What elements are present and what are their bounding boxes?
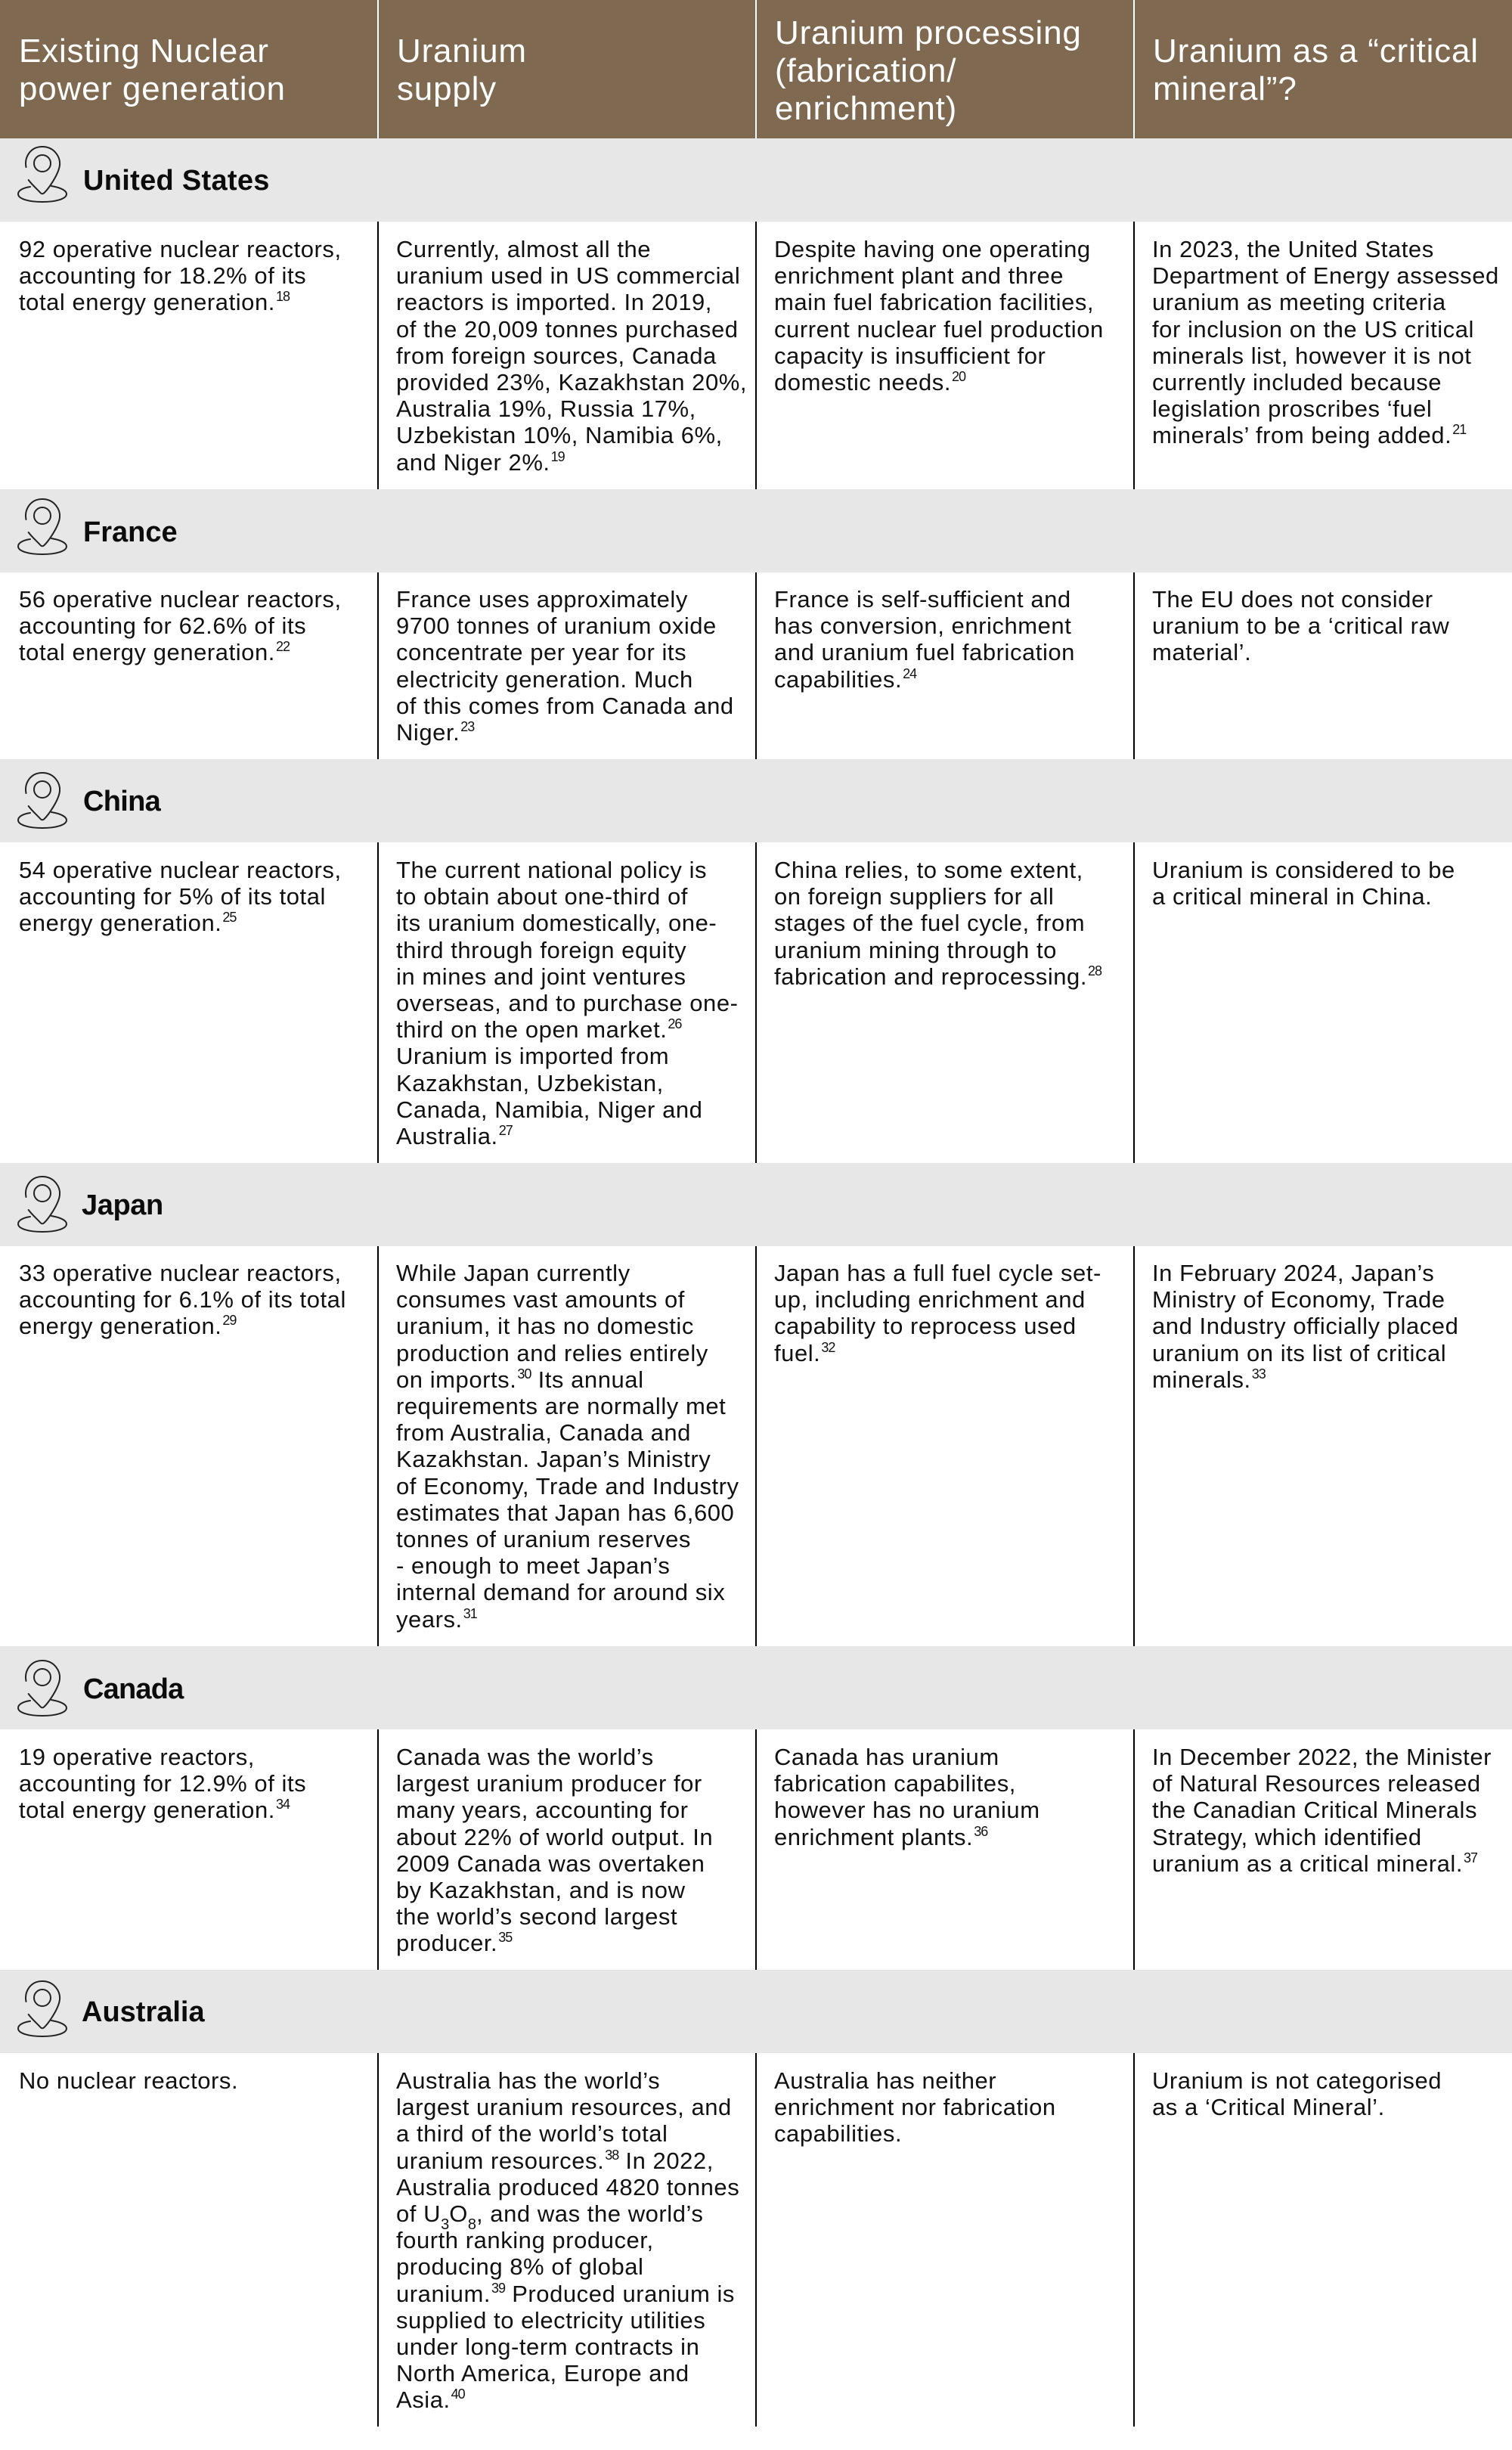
text: Japan supply: production and relies entirely [396, 1340, 708, 1366]
text: Japan processing [774, 1260, 1101, 1366]
text: Australia supply: largest uranium resources, and [396, 2094, 732, 2120]
text: France generation: accounting for 62.6% of its [19, 612, 306, 639]
text: US processing [774, 236, 1104, 395]
panel: Australia [0, 1970, 1512, 2427]
text: Australia generation: No nuclear reactors. [19, 2067, 238, 2094]
text: Japan supply: internal demand for around six [396, 1579, 725, 1605]
text: Canada supply: about 22% of world output. In [396, 1824, 713, 1850]
text: Canada critical mineral: the Canadian Critical Minerals [1152, 1797, 1477, 1823]
text: Japan processing: up, including enrichment and [774, 1286, 1086, 1313]
text: Japan supply: - enough to meet Japan’s [396, 1552, 670, 1579]
text: Japan supply: While Japan currently [396, 1260, 631, 1286]
text: China supply: The current national policy is [396, 857, 707, 883]
text: China generation [19, 857, 342, 936]
text: Japan supply [396, 1260, 739, 1633]
text: US critical mineral: minerals list, however it is not [1152, 343, 1471, 369]
text: US generation: total energy generation.18 [19, 289, 290, 315]
text: Canada supply: producer.35 [396, 1930, 512, 1956]
heading: uranium supply: Uranium [397, 33, 527, 70]
text: Australia critical mineral: as a ‘Critical Mineral’. [1152, 2094, 1385, 2120]
text: Canada supply: largest uranium producer for [396, 1770, 702, 1797]
text: Australia supply: Australia has the world’s [396, 2067, 660, 2094]
text: US supply: Currently, almost all the [396, 236, 651, 262]
text: Australia supply: Asia.40 [396, 2386, 465, 2413]
text: US critical mineral: legislation proscribes ‘fuel [1152, 395, 1432, 422]
text: France processing: France is self-sufficient and [774, 586, 1071, 612]
heading: United States: United States [83, 165, 270, 197]
text: Canada processing: fabrication capabilites, [774, 1770, 1016, 1797]
text: France supply: concentrate per year for its [396, 639, 686, 665]
text: Japan supply: consumes vast amounts of [396, 1286, 685, 1313]
text: Canada critical mineral: of Natural Resources released [1152, 1770, 1481, 1797]
text: China generation: energy generation.25 [19, 910, 236, 936]
panel: Japan [0, 1163, 1512, 1646]
text: France supply: of this comes from Canada and [396, 693, 734, 719]
text: Australia supply: producing 8% of global [396, 2253, 644, 2280]
text: China generation: accounting for 5% of its total [19, 883, 326, 910]
text: Japan supply: from Australia, Canada and [396, 1419, 691, 1446]
text: Australia supply: Australia produced 4820 tonnes [396, 2174, 739, 2200]
icon: location pin [17, 146, 67, 203]
text: Japan supply: uranium, it has no domestic [396, 1313, 694, 1339]
text: Australia supply: uranium resources.38 In 2022, [396, 2148, 714, 2174]
heading: uranium processing [775, 14, 1082, 127]
text: Australia supply [396, 2067, 739, 2413]
text: Canada generation [19, 1744, 306, 1823]
text: France generation: 56 operative nuclear reactors, [19, 586, 342, 612]
icon: location pin [17, 1176, 67, 1233]
heading: Australia: Australia [82, 1996, 205, 2028]
heading: uranium as a critical mineral [1153, 33, 1479, 107]
text: France critical mineral [1152, 586, 1449, 665]
text: China supply: Australia.27 [396, 1123, 513, 1149]
text: China supply: its uranium domestically, one- [396, 910, 717, 936]
text: US supply: from foreign sources, Canada [396, 343, 717, 369]
text: US critical mineral: In 2023, the United States [1152, 236, 1434, 262]
text: Canada processing [774, 1744, 1040, 1850]
panel: United States [0, 138, 1512, 489]
text: US critical mineral: currently included because [1152, 369, 1442, 395]
text: Australia critical mineral: Uranium is not categorised [1152, 2067, 1442, 2094]
text: France generation [19, 586, 342, 665]
text: Canada critical mineral [1152, 1744, 1492, 1877]
text: China processing: fabrication and reprocessing.28 [774, 963, 1101, 990]
text: US supply: uranium used in US commercial [396, 262, 740, 289]
text: Australia supply: North America, Europe and [396, 2360, 689, 2386]
text: Australia supply: supplied to electricity utilities [396, 2307, 705, 2334]
text: Australia supply: uranium.39 Produced uranium is [396, 2281, 735, 2307]
text: China processing [774, 857, 1102, 990]
heading: uranium processing: Uranium processing [775, 14, 1082, 51]
text: US critical mineral: Department of Energy assessed [1152, 262, 1499, 289]
text: France supply: France uses approximately [396, 586, 688, 612]
text: Canada generation: total energy generation.34 [19, 1797, 290, 1823]
text: US supply: and Niger 2%.19 [396, 449, 565, 476]
text: China supply: overseas, and to purchase one- [396, 990, 738, 1016]
heading: Canada: Canada [83, 1673, 183, 1705]
text: US critical mineral [1152, 236, 1499, 448]
text: Canada supply: many years, accounting for [396, 1797, 688, 1823]
text: Japan supply: Kazakhstan. Japan’s Ministry [396, 1446, 711, 1472]
text: Japan supply: of Economy, Trade and Industry [396, 1473, 739, 1499]
heading: France: France [83, 516, 178, 548]
text: US processing: capacity is insufficient for [774, 343, 1046, 369]
text: Japan supply: requirements are normally met [396, 1393, 726, 1419]
text: France processing: capabilities.24 [774, 666, 916, 693]
text: US supply [396, 236, 747, 476]
header row [0, 0, 1512, 138]
text: Canada supply [396, 1744, 713, 1956]
heading: Japan: Japan [82, 1189, 163, 1221]
text: France supply [396, 586, 734, 746]
text: US critical mineral: minerals’ from being added.21 [1152, 422, 1466, 448]
text: Japan generation [19, 1260, 346, 1339]
text: Canada supply: by Kazakhstan, and is now [396, 1877, 686, 1903]
text: US processing: enrichment plant and three [774, 262, 1064, 289]
text: US generation: accounting for 18.2% of its [19, 262, 306, 289]
text: US generation: 92 operative nuclear reactors, [19, 236, 342, 262]
text: Japan processing: fuel.32 [774, 1340, 835, 1366]
text: China critical mineral [1152, 857, 1455, 910]
panel: China [0, 759, 1512, 1163]
text: Canada generation: 19 operative reactors, [19, 1744, 255, 1770]
text: China critical mineral: a critical mineral in China. [1152, 883, 1432, 910]
text: Japan processing: capability to reprocess used [774, 1313, 1077, 1339]
text: China supply: in mines and joint ventures [396, 963, 686, 990]
text: China processing: uranium mining through to [774, 937, 1057, 963]
text: Canada supply: Canada was the world’s [396, 1744, 654, 1770]
text: US supply: reactors is imported. In 2019, [396, 289, 712, 315]
text: China supply: Uranium is imported from [396, 1043, 669, 1069]
text: US processing: Despite having one operating [774, 236, 1091, 262]
heading: uranium supply: supply [397, 70, 497, 107]
text: US processing: current nuclear fuel production [774, 316, 1104, 343]
text: France critical mineral: The EU does not consider [1152, 586, 1433, 612]
text: Japan supply: years.31 [396, 1606, 477, 1633]
text: Japan generation: 33 operative nuclear reactors, [19, 1260, 342, 1286]
text: France supply: 9700 tonnes of uranium oxide [396, 612, 717, 639]
heading: existing nuclear power generation: Existing Nuclear [19, 33, 269, 70]
text: Australia critical mineral [1152, 2067, 1442, 2120]
text: Australia supply: a third of the world’s total [396, 2120, 668, 2147]
text: Canada processing: enrichment plants.36 [774, 1824, 987, 1850]
text: US critical mineral: for inclusion on the US critical [1152, 316, 1474, 343]
text: Japan supply: on imports.30 Its annual [396, 1366, 644, 1393]
text: China processing: on foreign suppliers for all [774, 883, 1054, 910]
text: Australia supply: of U3O8, and was the world’s [396, 2200, 703, 2233]
text: Canada critical mineral: Strategy, which identified [1152, 1824, 1422, 1850]
text: France processing: and uranium fuel fabrication [774, 639, 1075, 665]
text: France supply: electricity generation. Much [396, 666, 693, 693]
text: China processing: China relies, to some extent, [774, 857, 1083, 883]
heading: uranium processing: enrichment) [775, 90, 957, 127]
icon: location pin [17, 498, 67, 555]
text: Japan processing: Japan has a full fuel cycle set- [774, 1260, 1101, 1286]
text: China processing: stages of the fuel cycle, from [774, 910, 1085, 936]
text: Japan supply: tonnes of uranium reserves [396, 1526, 691, 1552]
text: France generation: total energy generation.22 [19, 639, 290, 665]
text: Australia supply: fourth ranking producer, [396, 2227, 654, 2253]
text: Canada supply: the world’s second largest [396, 1903, 677, 1930]
text: Japan critical mineral: and Industry officially placed [1152, 1313, 1458, 1339]
text: China supply: to obtain about one-third of [396, 883, 688, 910]
text: Australia processing: capabilities. [774, 2120, 902, 2147]
icon: location pin [17, 772, 67, 829]
text: France critical mineral: material’. [1152, 639, 1251, 665]
text: US supply: Uzbekistan 10%, Namibia 6%, [396, 422, 723, 448]
text: Japan critical mineral: In February 2024, Japan’s [1152, 1260, 1434, 1286]
text: Australia processing: Australia has neither [774, 2067, 996, 2094]
text: China supply: third through foreign equity [396, 937, 686, 963]
text: US supply: of the 20,009 tonnes purchased [396, 316, 739, 343]
heading: existing nuclear power generation [19, 33, 286, 107]
heading: uranium as a critical mineral: mineral”? [1153, 70, 1297, 107]
text: US processing: main fuel fabrication facilities, [774, 289, 1094, 315]
heading: existing nuclear power generation: power generation [19, 70, 286, 107]
text: Canada processing: however has no uranium [774, 1797, 1040, 1823]
text: Japan critical mineral: uranium on its list of critical [1152, 1340, 1446, 1366]
panel: France [0, 489, 1512, 759]
text: France processing: has conversion, enrichment [774, 612, 1071, 639]
text: Japan generation: accounting for 6.1% of its total [19, 1286, 346, 1313]
text: US supply: provided 23%, Kazakhstan 20%, [396, 369, 747, 395]
panel: Canada [0, 1646, 1512, 1970]
icon: location pin [17, 1660, 67, 1717]
text: US processing: domestic needs.20 [774, 369, 965, 395]
text: France processing [774, 586, 1075, 693]
heading: uranium processing: (fabrication/ [775, 52, 956, 89]
text: Japan critical mineral: Ministry of Economy, Trade [1152, 1286, 1445, 1313]
text: US generation [19, 236, 342, 315]
text: China supply: Kazakhstan, Uzbekistan, [396, 1070, 664, 1096]
heading: uranium as a critical mineral: Uranium as a “critical [1153, 33, 1479, 70]
text: Japan critical mineral [1152, 1260, 1458, 1393]
text: Japan critical mineral: minerals.33 [1152, 1366, 1266, 1393]
text: China supply [396, 857, 738, 1149]
text: Australia processing [774, 2067, 1056, 2147]
text: Canada generation: accounting for 12.9% of its [19, 1770, 306, 1797]
text: Canada critical mineral: In December 2022, the Minister [1152, 1744, 1492, 1770]
heading: uranium supply [397, 33, 527, 107]
text: Canada critical mineral: uranium as a critical mineral.37 [1152, 1850, 1477, 1877]
text: Canada supply: 2009 Canada was overtaken [396, 1850, 705, 1877]
text: US critical mineral: uranium as meeting criteria [1152, 289, 1446, 315]
text: Australia supply: under long-term contracts in [396, 2334, 699, 2360]
text: US supply: Australia 19%, Russia 17%, [396, 395, 696, 422]
text: France critical mineral: uranium to be a ‘critical raw [1152, 612, 1449, 639]
heading: China: China [83, 786, 160, 817]
text: Japan generation: energy generation.29 [19, 1313, 236, 1339]
text: China generation: 54 operative nuclear reactors, [19, 857, 342, 883]
text: Japan supply: estimates that Japan has 6,600 [396, 1499, 734, 1526]
icon: location pin [17, 1980, 67, 2037]
text: China supply: third on the open market.26 [396, 1016, 681, 1043]
text: China critical mineral: Uranium is considered to be [1152, 857, 1455, 883]
text: France supply: Niger.23 [396, 719, 474, 746]
text: Australia processing: enrichment nor fabrication [774, 2094, 1056, 2120]
text: China supply: Canada, Namibia, Niger and [396, 1096, 702, 1123]
text: Canada processing: Canada has uranium [774, 1744, 999, 1770]
